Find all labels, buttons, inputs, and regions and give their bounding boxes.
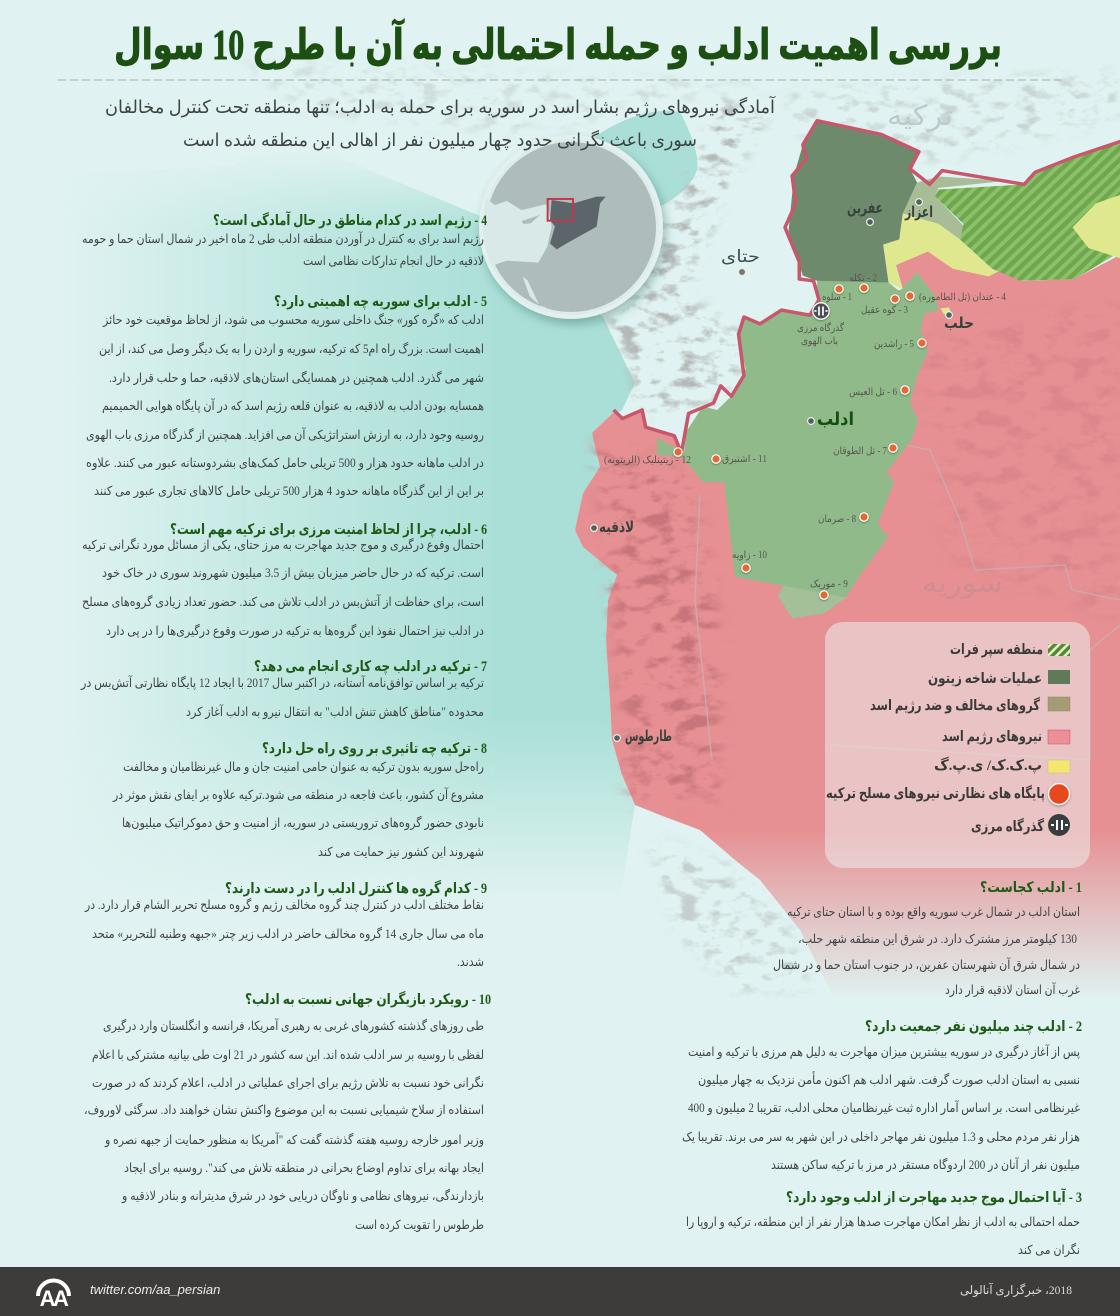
body text: مشروع آن کشور، باعث فاجعه در منطقه می شود.ترکیه علاوه بر ایفای نقش موثر در	[112, 787, 484, 803]
city: Azaz	[904, 199, 933, 221]
question 10	[84, 990, 491, 1233]
territory: Idlib opposition area	[683, 272, 939, 618]
city: Idlib: ادلب	[817, 409, 854, 429]
label: Syria: سوریه	[922, 568, 1003, 599]
inset: Mediterranean	[483, 198, 552, 266]
body text: نگران می کند	[1018, 1242, 1080, 1258]
city: Tartus	[614, 729, 672, 745]
border crossing: Bab al-Hawa: گذرگاه مرزی	[797, 322, 844, 334]
legend: border crossing	[971, 814, 1070, 836]
map: base map with sea, territories, border and place labels	[111, 61, 1120, 995]
body text: پس از آغاز درگیری در سوریه بیشترین میزان مهاجرت به دلیل هم مرزی با ترکیه و امنیت	[688, 1044, 1080, 1060]
post 7: 7 - تل الطوقان	[833, 446, 887, 457]
body text: ادلب که «گره کور» جنگ داخلی سوریه محسوب می شود، از لحاظ موقعیت خود حائز	[102, 312, 484, 328]
body text: غرب آن استان لاذقیه قرار دارد	[945, 982, 1080, 998]
label: Turkey: ترکیه	[887, 101, 953, 132]
observation posts	[604, 273, 1006, 599]
post 4: 4 - عندان (تل الطاموره)	[919, 292, 1006, 303]
relief in regime territory	[595, 300, 1120, 800]
post 11: 11 - اشتبرق	[722, 454, 767, 465]
legend: Olive Branch: عملیات شاخه زیتون	[928, 671, 1042, 687]
heading: 5 - ادلب برای سوریه چه اهمیتی دارد؟	[274, 294, 487, 310]
legend panel	[825, 622, 1090, 868]
post 12	[604, 448, 691, 466]
question 4	[82, 211, 487, 269]
body text: بر این از این گذرگاه ماهانه حدود 4 هزار 500 تریلی حامل کالاهای تجاری عبور می کنند	[94, 483, 484, 499]
heading: 8 - ترکیه چه تاثیری بر روی راه حل دارد؟	[262, 741, 487, 757]
body text: وزیر امور خارجه روسیه هفته گذشته گفت که "آمریکا به منظور حمایت از جبهه نصره و	[104, 1132, 484, 1148]
body text: نگرانی خود نسبت به تلاش رژیم برای اجرای عملیاتی در ادلب، اعلام کردند که در صورت	[92, 1075, 484, 1091]
body text: طرطوس را تقویت کرده است	[355, 1218, 484, 1233]
territory: PKK/YPG west	[883, 214, 1011, 289]
city: Hatay	[721, 247, 760, 276]
body text: هزار نفر مردم محلی و 1.3 میلیون نفر مهاجر داخلی در این شهر به سر می برند. تقریبا یک	[682, 1130, 1080, 1145]
body text	[80, 675, 484, 720]
twitter handle: twitter.com/aa_persian	[90, 1282, 220, 1297]
subtitle	[105, 95, 776, 151]
copyright: 2018، خبرگزاری آنالولی	[960, 1282, 1072, 1298]
legend: Turkish observation post: پایگاه های نظارتی نیروهای مسلح ترکیه	[826, 784, 1045, 802]
body text: ایجاد بهانه برای تداوم اوضاع بحرانی در منطقه تلاش می کند". روسیه برای ایجاد	[124, 1161, 484, 1176]
legend: border crossing: گذرگاه مرزی	[971, 817, 1044, 835]
sea: Mediterranean	[111, 166, 635, 874]
body text: است، برای حفاظت از آتش‌بس در ادلب تلاش می کند. حضور تعداد زیادی گروه‌های مسلح	[82, 594, 484, 610]
sea: Gulf of Iskenderun	[590, 111, 697, 215]
post 10: 10 - زاویه	[732, 550, 767, 561]
body text	[84, 897, 484, 969]
body text: بازدارندگی، نیروهای نظامی و ناوگان دریایی خود در شرق مدیترانه و بنادر لاذقیه و	[121, 1188, 484, 1204]
body text: روسیه وجود دارد، به ارزش استراتژیکی آن می افزاید. همچنین از گذرگاه مرزی باب الهوی	[86, 427, 484, 443]
inset: Red Sea	[523, 277, 553, 311]
city: Afrin	[847, 201, 883, 225]
post 2	[849, 273, 877, 292]
city: Afrin: عفرین	[847, 201, 883, 217]
body text: اهمیت است. بزرگ راه ام5 که ترکیه، سوریه و اردن را به یک دیگر وصل می کند، از این	[99, 341, 484, 357]
city: Tartus: طارطوس	[625, 729, 672, 745]
body text: لاذقیه در حال انجام تدارکات نظامی است	[303, 254, 484, 269]
logo: AA: AA	[40, 1286, 69, 1311]
body text	[773, 905, 1080, 998]
body text: همسایه بودن ادلب به لاذقیه، به عنوان قلعه رژیم اسد که در آن پایگاه هوایی الحمیمیم	[102, 398, 484, 414]
border: Turkey-Syria	[614, 121, 1120, 453]
body text: غیرنظامی است. بر اساس آمار اداره ثبت غیرنظامیان محلی ادلب، تقریبا 2 میلیون و 400	[688, 1100, 1080, 1116]
post 9: 9 - موریک	[810, 579, 848, 590]
post 3: 3 - کوه عقیل	[861, 305, 908, 316]
body text: راه‌حل سوریه بدون ترکیه به عنوان حامی امنیت جان و مال غیرنظامیان و مخالفت	[123, 760, 484, 775]
footer bar	[0, 1267, 1120, 1316]
divider	[58, 79, 1065, 81]
body text: رژیم اسد برای به کنترل در آوردن منطقه ادلب طی 2 ماه اخیر در شمال استان حما و حومه	[82, 231, 484, 247]
post 8	[818, 513, 868, 525]
body text: نابودی حضور گروه‌های تروریستی در سوریه، از امنیت و حق دموکراتیک میلیون‌ها	[122, 815, 484, 831]
post 1: 1 - سلوه	[822, 292, 852, 303]
body text	[82, 537, 484, 639]
body text	[82, 231, 484, 269]
question 3	[686, 1188, 1082, 1258]
body text: استفاده از سلاح شیمیایی نسبت به این موضوع واکنش نشان خواهند داد. سرگئی لاوروف،	[84, 1102, 484, 1118]
inset: Syria	[550, 197, 606, 249]
body text: شهر می گذرد. ادلب همچنین در همسایگی استان‌های لاذقیه، حما و حلب قرار دارد.	[109, 370, 484, 386]
inset: Idlib locator box	[548, 199, 573, 221]
territory: Euphrates Shield	[935, 143, 1120, 281]
subtitle: سوری باعث نگرانی حدود چهار میلیون نفر از اهالی این منطقه شده است	[183, 129, 697, 151]
body text	[112, 760, 484, 860]
post 2: 2 - تکله	[849, 273, 877, 284]
body text: 130 کیلومتر مرز مشترک دارد. در شرق این منطقه شهر حلب،	[798, 932, 1077, 947]
heading: 10 - رویکرد بازیگران جهانی نسبت به ادلب؟	[245, 990, 491, 1008]
body text: نقاط مختلف ادلب در کنترل چند گروه مخالف رژیم و گروه مسلح تحریر الشام قرار دارد. در	[84, 897, 484, 913]
question 6	[82, 522, 487, 639]
heading: 7 - ترکیه در ادلب چه کاری انجام می دهد؟	[254, 659, 487, 675]
question 8	[112, 741, 487, 860]
border crossing: Bab al-Hawa	[797, 303, 844, 347]
heading: 1 - ادلب کجاست؟	[980, 880, 1082, 896]
question 9	[84, 879, 487, 969]
legend: regime forces: نیروهای رژیم اسد	[942, 729, 1042, 745]
body text: در ادلب نیز احتمال نفوذ این گروه‌ها به ترکیه در صورت وقوع درگیری‌ها را در پی دارد	[106, 623, 484, 639]
legend: opposition groups: گروهای مخالف و ضد رژیم اسد	[870, 696, 1040, 714]
body text	[86, 312, 484, 499]
body text: شهروند این کشور نیز حمایت می کند	[318, 845, 484, 860]
body text: محدوده "مناطق کاهش تنش ادلب" به انتقال نیرو به ادلب آغاز کرد	[186, 704, 484, 720]
body text: میلیون نفر از آنان در 200 اردوگاه مستقر در مرز با ترکیه ساکن هستند	[771, 1157, 1080, 1173]
question 2	[682, 1019, 1082, 1173]
territory: Olive Branch / Afrin	[789, 121, 917, 283]
body text	[686, 1215, 1080, 1258]
territory: Idlib south strip	[778, 586, 846, 618]
city: Latakia: لاذقیه	[599, 520, 634, 536]
body text: ماه می سال جاری 14 گروه مخالف حاضر در ادلب زیر چتر «جبهه وطنیه للتحریر» متحد	[92, 926, 484, 942]
body text	[84, 1018, 484, 1233]
inset: Cyprus	[522, 215, 540, 224]
legend: Euphrates Shield: منطقه سپر فرات	[950, 642, 1043, 658]
territory: Idlib west strip	[657, 438, 685, 458]
body text: است. ترکیه که در حال حاضر میزبان بیش از 3.5 میلیون شهروند سوری در خاک خود	[102, 566, 484, 581]
city: Azaz: اعزاز	[904, 205, 933, 221]
territory: Assad regime forces	[575, 251, 1120, 1010]
subtitle: آمادگی نیروهای رژیم بشار اسد در سوریه برای حمله به ادلب؛ تنها منطقه تحت کنترل مخالفان	[105, 95, 776, 118]
heading: 4 - رژیم اسد در کدام مناطق در حال آمادگی است؟	[213, 211, 487, 229]
legend: Turkish observation post	[826, 784, 1070, 804]
body text: شدند.	[457, 955, 484, 969]
body text: لفظی با روسیه بر سر ادلب شده اند. این سه کشور در 21 اوت طی بیانیه مشترکی با اعلام	[92, 1048, 484, 1063]
post 6: 6 - تل العیس	[849, 387, 897, 398]
inset globe with Syria	[481, 137, 661, 317]
question 1	[773, 880, 1082, 998]
body text: در ادلب ماهانه حدود هزار و 500 تریلی حامل کمک‌های بشردوستانه عبور می کنند. علاوه	[86, 456, 484, 471]
post 3	[861, 295, 908, 316]
heading: 6 - ادلب، چرا از لحاظ امنیت مرزی برای ترکیه مهم است؟	[170, 522, 487, 538]
legend: PKK/YPG: پ.ک.ک/ ی.پ.گ	[934, 757, 1042, 774]
post 5: 5 - راشدین	[874, 339, 914, 350]
territory: PKK/YPG east	[1072, 195, 1120, 258]
body text: در شمال شرق آن شهرستان عفرین، در جنوب استان حما و در شمال	[773, 957, 1080, 973]
body text: نسبی به استان ادلب صورت گرفت. شهر ادلب هم اکنون مأمن نزدیک به چهار میلیون	[698, 1071, 1080, 1088]
question 5	[86, 294, 487, 499]
post 9	[810, 579, 848, 599]
body text: احتمال وقوع درگیری و موج جدید مهاجرت به مرز حتای، یکی از مسائل مورد نگرانی ترکیه	[82, 537, 484, 553]
body text: ترکیه بر اساس توافق‌نامه آستانه، در اکتبر سال 2017 با ایجاد 12 پایگاه نظارتی آتش‌بس در	[80, 675, 484, 691]
question 7	[80, 659, 487, 720]
post 12: 12 - زیتینلیک (الزیتونه)	[604, 455, 691, 466]
city: Hatay: حتای	[721, 247, 760, 266]
post 1	[822, 285, 852, 303]
post 8: 8 - صرمان	[818, 514, 856, 525]
city: Latakia	[591, 520, 634, 536]
body text: استان ادلب در شمال غرب سوریه واقع بوده و با استان حتای ترکیه	[787, 905, 1080, 920]
heading: 2 - ادلب چند میلیون نفر جمعیت دارد؟	[865, 1019, 1082, 1035]
city: Aleppo: حلب	[944, 316, 974, 332]
post 10	[732, 550, 767, 572]
body text	[682, 1044, 1080, 1173]
border crossing: Bab al-Hawa: باب الهوی	[801, 336, 838, 347]
terrain relief: Hatay and Turkey	[240, 60, 1120, 990]
body text: طی روزهای گذشته کشورهای غربی به رهبری آمریکا، فرانسه و انگلستان وارد درگیری	[103, 1018, 484, 1034]
road lines	[695, 440, 1120, 760]
heading: 9 - کدام گروه ها کنترل ادلب را در دست دارند؟	[225, 879, 487, 897]
territory: Aleppo pocket	[940, 307, 951, 314]
territory: Azaz opposition area	[903, 176, 1006, 239]
